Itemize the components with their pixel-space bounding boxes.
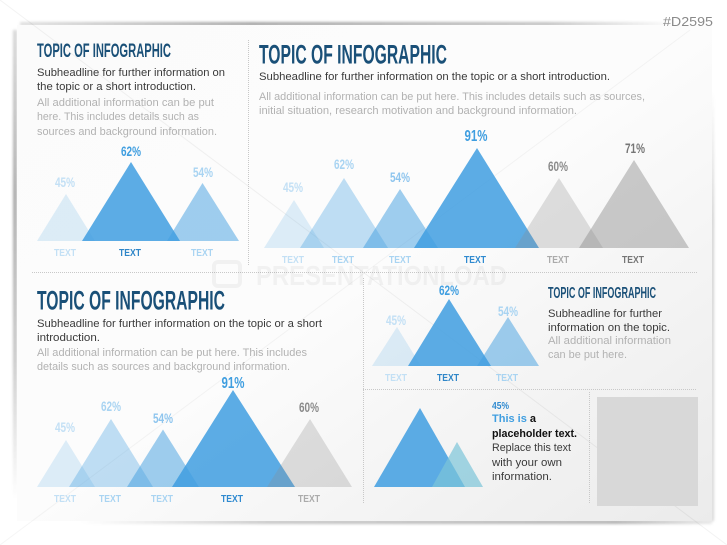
triangle chart: 60% [548, 158, 568, 174]
subheadline: Subheadline for further [548, 308, 662, 320]
subheadline: Subheadline for further information on the topic or a short [37, 318, 322, 330]
subheadline: Subheadline for further information on the topic or a short introduction. [259, 71, 610, 83]
triangle chart: 54% [498, 303, 518, 319]
triangle chart: TEXT [221, 493, 243, 505]
triangle chart [264, 128, 689, 266]
triangle chart: 91% [222, 375, 244, 392]
subheadline [548, 308, 670, 334]
triangle chart: TEXT [464, 254, 486, 266]
triangle chart: 62% [101, 398, 121, 414]
overlapping triangles [374, 408, 483, 487]
triangle chart: 45% [386, 312, 406, 328]
subheadline: introduction. [37, 332, 100, 344]
triangle chart: 54% [390, 169, 410, 185]
triangle chart: 45% [55, 174, 75, 190]
body text [37, 347, 307, 373]
subheadline: the topic or a short introduction. [37, 81, 196, 93]
triangle chart: TEXT [151, 493, 173, 505]
triangle chart: TEXT [54, 247, 76, 259]
body text: can be put here. [548, 349, 627, 361]
triangle chart: TEXT [385, 372, 407, 384]
triangle chart: TEXT [332, 254, 354, 266]
triangle chart: TEXT [99, 493, 121, 505]
triangle chart: TEXT [282, 254, 304, 266]
subheadline: Subheadline for further information on [37, 67, 225, 79]
triangle chart: TEXT [191, 247, 213, 259]
body text: here. This includes details such as [37, 111, 199, 123]
triangle chart: 54% [193, 164, 213, 180]
body text: All additional information can be put here. This includes [37, 347, 307, 359]
body text: All additional information can be put here. This includes details such as sources, [259, 91, 645, 103]
heading: TOPIC OF INFOGRAPHIC [259, 40, 447, 70]
triangle chart: 62% [334, 156, 354, 172]
placeholder text: information. [492, 471, 552, 483]
watermark: PRESENTATIONLOAD [256, 260, 507, 291]
triangle chart [372, 282, 539, 384]
triangle chart: 71% [625, 140, 645, 156]
triangle chart: 60% [299, 399, 319, 415]
subheadline [37, 67, 225, 93]
body text: sources and background information. [37, 126, 217, 138]
triangle chart: TEXT [119, 247, 141, 259]
panel: middle right [372, 282, 671, 384]
triangle chart: 45% [283, 179, 303, 195]
placeholder text [491, 401, 577, 483]
panel: top right [259, 40, 689, 266]
panel: top left [37, 41, 239, 259]
triangle chart: 62% [121, 143, 141, 159]
triangle chart: 54% [153, 410, 173, 426]
panel: bottom left [37, 286, 352, 505]
body text [548, 335, 671, 361]
triangle chart: TEXT [298, 493, 320, 505]
placeholder text: 45% [492, 401, 509, 412]
triangle chart: TEXT [622, 254, 644, 266]
heading: TOPIC OF INFOGRAPHIC [37, 286, 225, 316]
triangle chart: TEXT [547, 254, 569, 266]
body text: details such as sources and background information. [37, 361, 290, 373]
panel: bottom right [374, 397, 698, 506]
placeholder text: with your own [491, 457, 562, 469]
body text: All additional information can be put [37, 97, 214, 109]
body text: initial situation, research motivation and background information. [259, 105, 577, 117]
triangle chart [37, 375, 352, 505]
triangle chart: 45% [55, 419, 75, 435]
triangle chart: TEXT [389, 254, 411, 266]
triangle chart: TEXT [496, 372, 518, 384]
triangle chart: TEXT [437, 372, 459, 384]
triangle chart: 62% [439, 282, 459, 298]
placeholder text: This is a [492, 413, 537, 425]
triangle chart [37, 143, 239, 259]
body text [37, 97, 217, 138]
subheadline [37, 318, 322, 344]
placeholder text: placeholder text. [492, 428, 577, 440]
placeholder text: Replace this text [492, 442, 571, 454]
product code: #D2595 [663, 14, 713, 29]
heading: TOPIC OF INFOGRAPHIC [37, 41, 171, 62]
body text: All additional information [548, 335, 671, 347]
image placeholder [597, 397, 698, 506]
body text [259, 91, 645, 117]
subheadline: information on the topic. [548, 322, 670, 334]
triangle chart: TEXT [54, 493, 76, 505]
triangle chart: 91% [464, 128, 488, 145]
